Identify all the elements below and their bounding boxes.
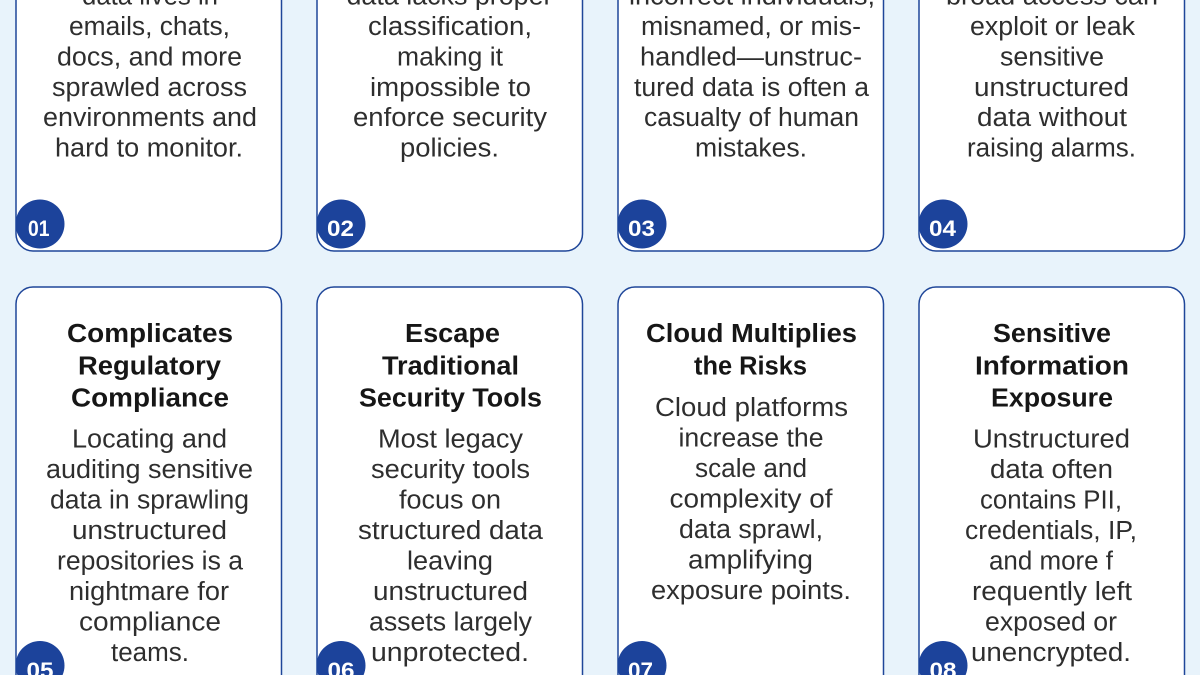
panel: card 02	[316, 0, 582, 251]
text: card 05 body	[46, 426, 253, 667]
heading: Sensitive Information Exposure: Sensitive	[993, 320, 1111, 348]
text: card 02 body	[346, 0, 553, 163]
text: card 08 body	[965, 426, 1137, 667]
text: card 02 body: making it	[397, 43, 503, 71]
heading: Escape Traditional Security Tools: Escape	[405, 320, 500, 348]
text: card 07 body: Cloud platforms	[655, 394, 848, 422]
text: card 02 body: impossible to	[370, 74, 531, 102]
text: card 08 body: and more f	[989, 548, 1114, 576]
text: card 01 body: hard to monitor.	[55, 135, 243, 163]
heading: Cloud Multiplies the Risks: Cloud Multiplies	[646, 320, 857, 348]
text: card 01 body: docs, and more	[57, 43, 242, 71]
heading: Sensitive Information Exposure: Exposure	[991, 384, 1113, 412]
text: card 05 body: auditing sensitive	[46, 456, 253, 484]
badge: 07	[618, 641, 666, 675]
badge: 04: 04	[929, 216, 957, 241]
text: card 04 body: data without	[977, 104, 1127, 132]
text: card 08 body: unencrypted.	[971, 639, 1131, 667]
panel: card 04	[918, 0, 1184, 251]
text: card 05 body: nightmare for	[69, 578, 230, 606]
badge: 05	[16, 641, 64, 675]
panel: card 05	[16, 287, 282, 675]
heading: Complicates Regulatory Compliance: Complicates	[67, 320, 233, 348]
text: card 03 body: mistakes.	[695, 135, 807, 163]
panel: card 08	[918, 287, 1184, 675]
panel: card 01	[16, 0, 282, 251]
text: card 07 body	[651, 394, 851, 605]
text: card 07 body: amplifying	[688, 546, 813, 574]
heading: Cloud Multiplies the Risks	[646, 320, 857, 380]
heading: Escape Traditional Security Tools: Security Tools	[359, 384, 542, 412]
text: card 08 body: credentials, IP,	[965, 517, 1137, 545]
text: card 07 body: exposure points.	[651, 577, 851, 605]
text: card 02 body: enforce security	[353, 104, 547, 132]
heading: Complicates Regulatory Compliance	[67, 320, 233, 412]
text: card 07 body: scale and	[695, 455, 807, 483]
text: card 06 body: structured data	[358, 517, 544, 545]
heading: Sensitive Information Exposure	[975, 320, 1129, 412]
badge: 01	[16, 200, 64, 248]
badge: 04	[918, 200, 968, 248]
text: card 03 body: misnamed, or mis-	[641, 13, 861, 41]
text: card 03 body: casualty of human	[644, 104, 859, 132]
text: card 03 body	[629, 0, 875, 163]
panel: card 06	[316, 287, 582, 675]
text: card 02 body: policies.	[400, 135, 499, 163]
text: card 03 body: handled—unstruc-	[640, 43, 862, 71]
text: card 05 body: data in sprawling	[50, 487, 249, 515]
text: card 06 body: unstructured	[373, 578, 528, 606]
badge: 03: 03	[628, 216, 655, 241]
text: card 08 body: requently left	[972, 578, 1132, 606]
text: card 05 body: repositories is a	[57, 548, 244, 576]
text: card 02 body: classification,	[368, 13, 532, 41]
panel: card 07	[618, 287, 884, 675]
text: card 08 body: data often	[990, 456, 1113, 484]
text: card 04 body: sensitive	[1000, 43, 1104, 71]
text: card 01 body: environments and	[43, 104, 257, 132]
text: card 04 body: exploit or leak	[970, 13, 1135, 41]
text: card 05 body: Locating and	[72, 426, 227, 454]
heading: Cloud Multiplies the Risks: the Risks	[694, 352, 807, 380]
badge: 02: 02	[327, 216, 354, 241]
badge: 08	[918, 641, 968, 675]
text: card 06 body: security tools	[371, 456, 530, 484]
badge: 02	[316, 200, 366, 248]
text: card 04 body	[946, 0, 1158, 163]
text: card 04 body: unstructured	[974, 74, 1129, 102]
text: card 06 body: focus on	[399, 487, 501, 515]
heading: Sensitive Information Exposure: Information	[975, 352, 1129, 380]
text: card 06 body: leaving	[407, 548, 493, 576]
text: card 07 body: complexity of	[670, 486, 833, 514]
heading: Escape Traditional Security Tools: Traditional	[382, 352, 519, 380]
badge: 03	[618, 200, 666, 248]
badge: 06	[316, 641, 366, 675]
text: card 01 body	[43, 0, 257, 163]
text: card 05 body: teams.	[111, 639, 189, 667]
heading: Complicates Regulatory Compliance: Regulatory	[78, 352, 222, 380]
text: card 08 body: contains PII,	[980, 487, 1122, 515]
text: card 05 body: unstructured	[72, 517, 227, 545]
text: card 06 body: assets largely	[369, 609, 532, 637]
text: card 08 body: exposed or	[985, 609, 1118, 637]
text: card 05 body: compliance	[79, 609, 221, 637]
heading: Complicates Regulatory Compliance: Compliance	[71, 384, 229, 412]
text: card 07 body: data sprawl,	[679, 516, 823, 544]
heading: Escape Traditional Security Tools	[359, 320, 542, 412]
text: card 08 body: Unstructured	[973, 426, 1130, 454]
badge: 01: 01	[28, 216, 50, 241]
panel: card 03	[618, 0, 884, 251]
text: card 06 body	[358, 426, 544, 667]
text: card 03 body: tured data is often a	[634, 74, 870, 102]
text: card 06 body: Most legacy	[378, 426, 523, 454]
text: card 01 body: emails, chats,	[69, 13, 230, 41]
text: card 06 body: unprotected.	[371, 639, 529, 667]
text: card 01 body: sprawled across	[52, 74, 247, 102]
text: card 04 body: raising alarms.	[967, 135, 1136, 163]
text: card 07 body: increase the	[678, 424, 824, 452]
